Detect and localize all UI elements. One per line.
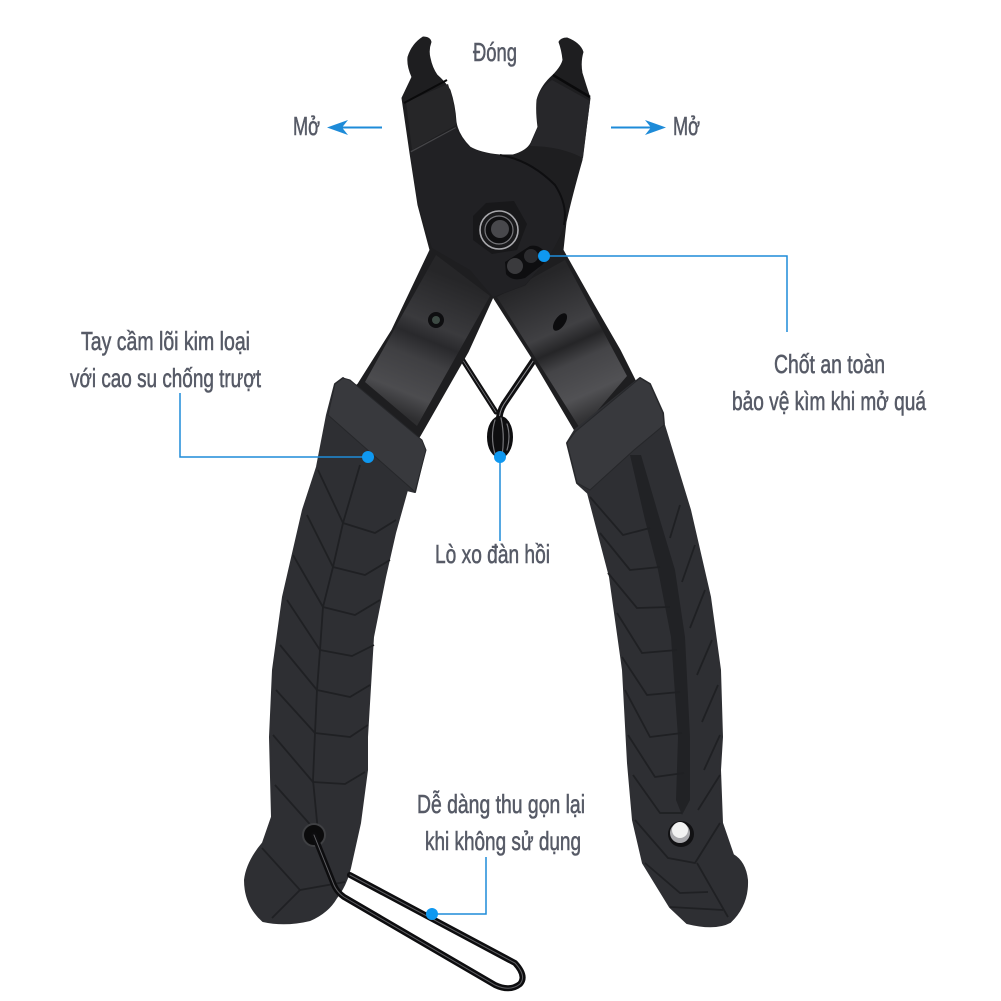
- right grip ribs: [590, 497, 728, 917]
- right grip centre groove: [630, 455, 690, 815]
- callout text: compact storage: Dễ dàng thu gọn lại: [417, 789, 585, 819]
- callout text: compact storage: [417, 789, 585, 856]
- right metal arm and jaw: [470, 38, 640, 445]
- callout text: safety pin: bảo vệ kìm khi mở quá: [732, 386, 926, 416]
- safety pin: [505, 246, 546, 279]
- callout: handle leader: [180, 393, 374, 463]
- illustration: chain plier: [245, 37, 747, 988]
- right grip collar: [567, 378, 664, 490]
- left grip ribs: [262, 465, 396, 918]
- folding lock ring: [303, 824, 523, 988]
- rivet: [428, 312, 444, 328]
- callout text: safety pin: [732, 349, 926, 416]
- spring slot: [550, 311, 570, 333]
- callout: safety pin leader: [538, 250, 787, 332]
- left metal arm and jaw: [345, 37, 565, 450]
- callout: spring leader: [494, 451, 506, 541]
- spring: [455, 320, 561, 456]
- callout text: handle: [70, 326, 262, 393]
- right open arrow: [611, 120, 666, 135]
- label: Mở right: Mở: [673, 111, 700, 141]
- left rubber grip: [245, 378, 426, 923]
- callout: lock ring leader: [426, 857, 486, 920]
- callout text: handle: với cao su chống trượt: [70, 363, 262, 393]
- pivot bolt: [473, 201, 527, 254]
- left arm plate: [365, 255, 490, 426]
- label: Đóng: Đóng: [473, 37, 517, 67]
- right arm plate: [497, 260, 627, 430]
- left grip collar: [328, 378, 426, 492]
- callout text: compact storage: khi không sử dụng: [425, 826, 581, 856]
- right rubber grip: [567, 378, 747, 926]
- callout text: safety pin: Chốt an toàn: [774, 349, 885, 379]
- callout text: handle: Tay cầm lõi kim loại: [81, 326, 250, 356]
- grip hole: [668, 821, 694, 847]
- label: Mở left: Mở: [293, 111, 320, 141]
- left open arrow: [327, 120, 382, 135]
- callout text: spring: Lò xo đàn hồi: [435, 539, 550, 569]
